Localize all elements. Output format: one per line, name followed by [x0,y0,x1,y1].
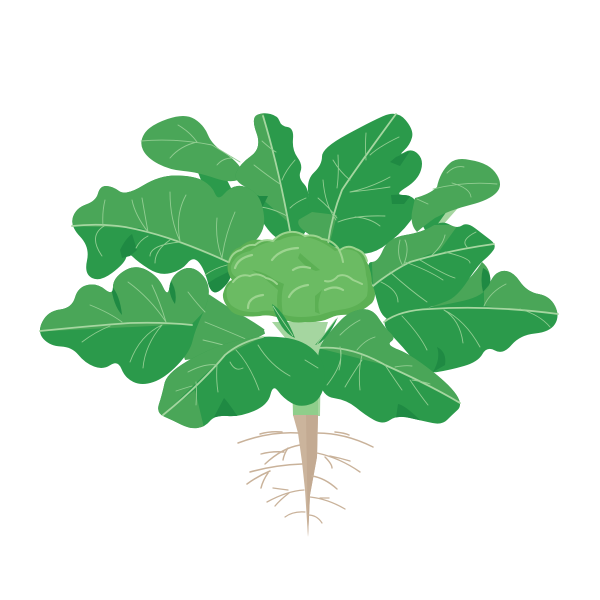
roots [238,415,373,537]
floret crevices [252,253,322,315]
leaf: bottom left [158,336,323,428]
head main body [226,236,368,317]
rim highlights [229,232,367,284]
side roots [238,432,299,443]
leaf: right low [383,268,559,372]
leaf: top left small [141,116,245,205]
taproot [293,415,318,537]
small stem leaves [272,304,295,338]
leaf: top centre [236,113,309,238]
floret inner highlights [235,248,343,308]
broccoli head [223,232,375,345]
stem [264,320,343,416]
leaf: behind right low [425,262,490,307]
leaf: top right [298,113,422,254]
leaf: left low [39,267,209,384]
head silhouette shade [223,233,375,322]
leaf: right small [412,159,500,244]
leaf: back lower left blob [168,291,268,360]
illustration: broccoli plant [39,113,559,536]
leaf: right middle [368,222,495,318]
leaf: bottom right [318,309,461,424]
leaf: left big [71,176,264,292]
